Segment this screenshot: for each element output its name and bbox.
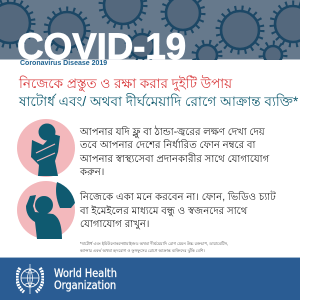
text block: second advice — [80, 190, 276, 230]
icon: WHO emblem — [16, 264, 44, 294]
footnote — [80, 241, 228, 253]
text block: first advice: আপনার স্বাস্থ্যসেবা প্রদানকারীর সাথে যোগাযোগ — [80, 154, 269, 165]
footnote: *ষাটোর্ধ এবং ইমিউনোকম্প্রোমাইজড অথবা দীর্ঘমেয়াদি রোগ যেমন উচ্চ রক্তচাপ, ডায়াবেটিস, — [80, 241, 228, 246]
text block: first advice — [80, 126, 270, 178]
footer band — [0, 257, 300, 300]
icon: person on phone with speech bubble — [17, 181, 75, 239]
text block: second advice: যোগাযোগ রাখুন। — [80, 219, 150, 230]
title: COVID-19: COVID-19 — [17, 26, 186, 67]
text block: first advice: করুন। — [80, 167, 104, 178]
icon: person coughing into elbow — [17, 119, 75, 177]
text block: first advice: তবে আপনার দেশের নির্ধারিত ফোন নম্বরে বা — [80, 140, 255, 151]
heading: teal: ষাটোর্ধ এবং/ অথবা দীর্ঘমেয়াদি রোগে আক্রান্ত ব্যক্তি* — [19, 94, 298, 109]
logo text: World Health Organization: World Health — [54, 266, 117, 280]
text block: second advice: নিজেকে একা মনে করবেন না। ফোন, ভিডিও চ্যাট — [80, 192, 276, 203]
header: virus pattern background — [0, 0, 300, 60]
logo text: World Health Organization: Organization — [54, 278, 116, 292]
footnote: ক্যান্সার এবং/ অথবা হৃদরোগ ও ফুসফুসের রোগে আক্রান্ত ব্যক্তিদের ঝুঁকি বেশি। — [80, 248, 205, 253]
subtitle: Coronavirus Disease 2019: Coronavirus Disease 2019 — [20, 60, 107, 67]
text block: second advice: বা ইমেইলের মাধ্যমে বন্ধু ও স্বজনদের সাথে — [80, 206, 247, 217]
text block: first advice: আপনার যদি ফ্লু বা ঠান্ডা-জ্বরের লক্ষণ দেখা দেয় — [80, 127, 265, 138]
heading: red: নিজেকে প্রস্তুত ও রক্ষা করার দুইটি উপায় — [19, 76, 232, 91]
logo text: World Health Organization — [54, 266, 117, 292]
